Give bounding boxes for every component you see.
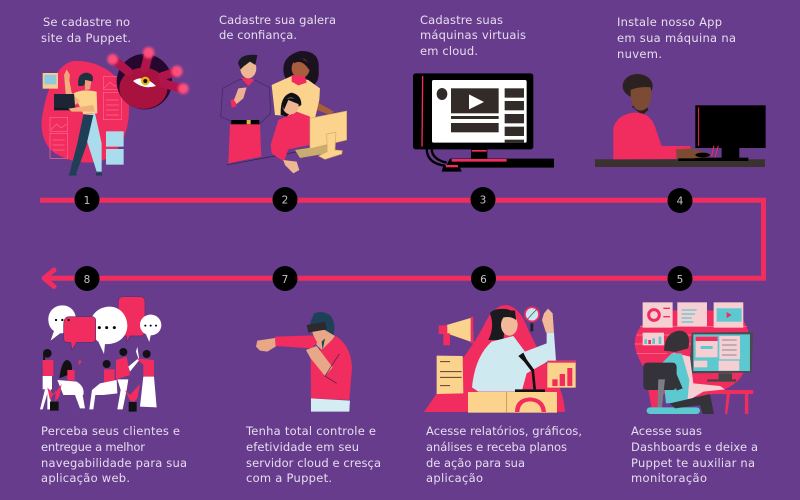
- badge 8: 8: [84, 274, 90, 286]
- step 8 text: Perceba seus clientes e: [41, 424, 180, 438]
- step 7 text: Tenha total controle e: [245, 424, 376, 438]
- illustration 3: monitor with video: [413, 73, 554, 172]
- step 2 text: Cadastre sua galera: [219, 13, 336, 27]
- step 5 text: Dashboards e deixe a: [631, 440, 758, 454]
- step 6 text: de ação para sua: [426, 456, 525, 470]
- step 8 text: aplicação web.: [41, 471, 130, 485]
- step 4 text: em sua máquina na: [617, 31, 736, 45]
- step 7 text: efetividade em seu: [246, 440, 359, 454]
- badge 2: 2: [282, 194, 288, 206]
- illustration 1: sign-up with virus eye: [42, 47, 189, 176]
- badge 3: [470, 187, 496, 212]
- step number badges: [74, 187, 692, 291]
- step 1 text: Se cadastre no: [43, 15, 130, 29]
- badge 7: 7: [282, 274, 288, 286]
- illustration 5: dashboards monitoring: [635, 302, 753, 414]
- badge 4: [668, 188, 692, 213]
- step 6 text: Acesse relatórios, gráficos,: [426, 424, 582, 438]
- step 7 text: servidor cloud e cresça: [246, 456, 381, 470]
- step 4 text: nuvem.: [617, 47, 662, 61]
- illustration 2: team at computer: [221, 51, 347, 173]
- process path with arrow: [40, 200, 764, 286]
- step 8 text: navegabilidade para sua: [41, 456, 187, 470]
- badge 2: [272, 187, 298, 212]
- badge 1: 1: [84, 195, 90, 207]
- badge 6: [471, 266, 496, 291]
- badge 4: 4: [677, 196, 684, 208]
- step 7 text: com a Puppet.: [246, 471, 332, 485]
- badge 3: 3: [480, 194, 486, 206]
- badge 5: 5: [677, 274, 683, 286]
- step 4 text: Instale nosso App: [617, 15, 722, 29]
- step 2 text: de confiança.: [219, 28, 297, 42]
- illustration 8: customers talking: [40, 297, 161, 412]
- step 8 text: entregue a melhor: [41, 440, 145, 454]
- step 1 text: site da Puppet.: [41, 31, 131, 45]
- badge 1: [74, 187, 100, 212]
- step 6 text: aplicação: [426, 471, 483, 485]
- illustration 7: VR boxer: [256, 312, 352, 412]
- step 6 text: análises e receba planos: [426, 440, 567, 454]
- step 3 text: em cloud.: [420, 44, 478, 58]
- badge 5: [668, 266, 692, 291]
- illustration 4: person installing app: [595, 74, 766, 167]
- badge 8: [74, 266, 100, 291]
- illustration 6: presenter with megaphone: [424, 305, 576, 413]
- step 5 text: Puppet te auxiliar na: [631, 456, 755, 470]
- step 3 text: máquinas virtuais: [420, 28, 526, 42]
- step 3 text: Cadastre suas: [420, 13, 503, 27]
- badge 6: 6: [480, 274, 487, 286]
- step 5 text: monitoração: [631, 471, 707, 485]
- step 5 text: Acesse suas: [631, 424, 702, 438]
- badge 7: [272, 266, 298, 291]
